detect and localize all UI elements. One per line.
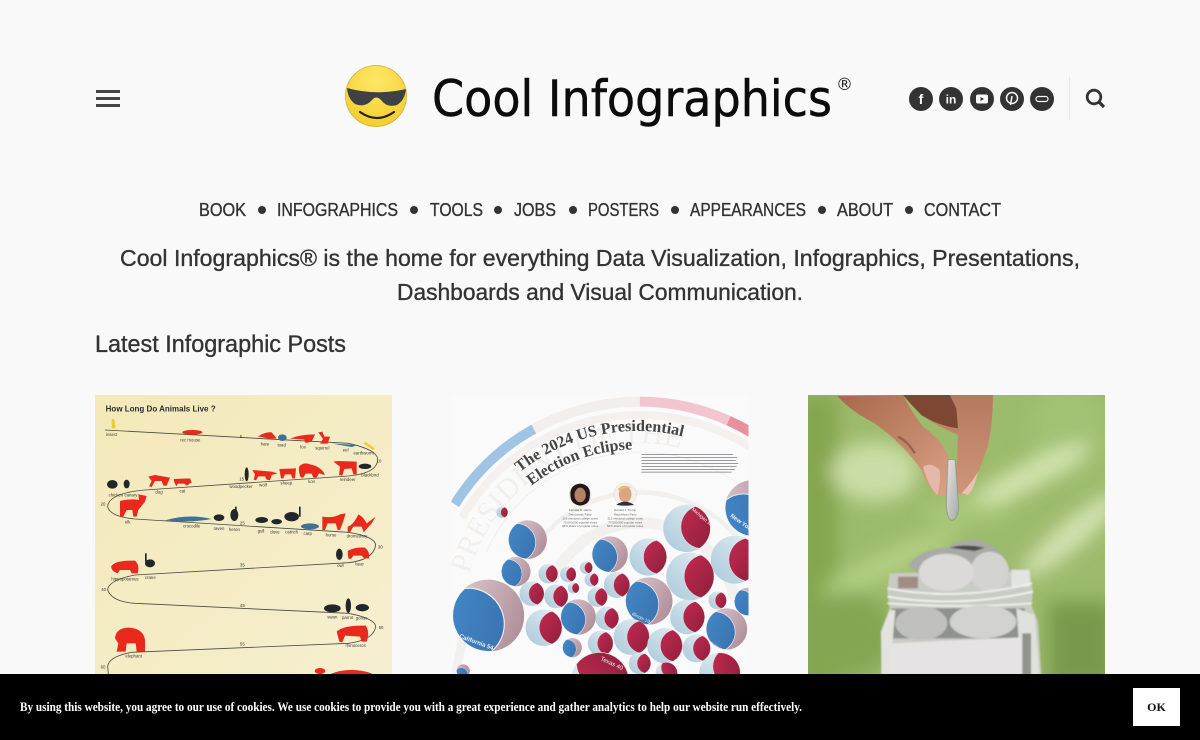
icon: facebook (909, 87, 933, 111)
red animals (111, 430, 376, 675)
animal labels: lion (308, 479, 316, 484)
candidate details (562, 508, 644, 528)
blurred green background (795, 382, 1129, 688)
animal labels: 55 (240, 642, 245, 647)
intro paragraph (642, 454, 738, 473)
state labels: Illinois 19 (631, 611, 651, 624)
animal labels: dromedary (347, 534, 368, 539)
animal labels: squirrel (315, 446, 329, 451)
animal labels: dove (270, 529, 280, 534)
cookie banner (0, 674, 1200, 740)
navigation menu (199, 200, 1001, 220)
state labels: California 54 (458, 634, 495, 652)
title: How Long Do Animals Live ? (106, 405, 216, 414)
animal labels: 25 (240, 520, 245, 525)
logo wordmark: Cool Infographics (432, 70, 832, 128)
state labels: Virginia 13 (708, 640, 730, 655)
candidate details: 312 electoral college votes (607, 517, 643, 521)
candidate details: 75,000,000 popular votes (563, 520, 598, 524)
black and blue animals (107, 464, 371, 613)
red state bubbles (496, 503, 759, 716)
falling coin (946, 459, 959, 520)
animal labels: swan (327, 614, 338, 619)
animal labels: ostrich (285, 530, 299, 535)
logo (346, 66, 853, 128)
animal labels: gull (258, 529, 264, 534)
animal labels: carp (303, 531, 312, 536)
state labels: Texas 40 (599, 656, 624, 672)
tagline: Cool Infographics® is the home for everything Data Visualization, Infographics, Presentations, (120, 245, 1080, 271)
animal labels: bear (355, 562, 365, 567)
thumb and palm (903, 395, 993, 494)
icon: linkedin: in (946, 92, 956, 106)
tagline: Dashboards and Visual Communication. (397, 279, 803, 305)
animal labels: hippopotamus (111, 576, 139, 581)
animal labels: goose (356, 616, 368, 621)
state labels: Michigan 15 (691, 507, 714, 527)
animal labels: chicken canary (109, 493, 138, 498)
navigation menu: POSTERS (588, 200, 659, 220)
candidate details: 226 electoral college votes (562, 517, 598, 521)
navigation menu: BOOK (199, 200, 246, 220)
seal backdrop: PRESIDENT OF THE (452, 424, 681, 573)
icon: youtube (970, 87, 994, 111)
animal labels: cat (179, 488, 186, 493)
animal labels: 35 (240, 562, 245, 567)
hand (837, 395, 993, 497)
tagline (120, 245, 1080, 305)
navigation menu: JOBS (514, 200, 556, 220)
animal labels: horse (326, 532, 337, 537)
animal labels: blackbird (361, 472, 379, 477)
card: coins in jar photo (808, 395, 1105, 674)
candidate portraits (569, 483, 636, 506)
blue state bubbles (441, 469, 793, 680)
animal labels: eel (343, 448, 349, 453)
animal labels: 40 (101, 587, 107, 592)
navigation menu: INFOGRAPHICS (277, 200, 398, 220)
animal labels: woodpecker (229, 484, 253, 489)
candidate details: Kamala D. Harris (569, 508, 592, 512)
index finger (837, 395, 949, 497)
animal labels: 60 (101, 664, 106, 669)
animal labels: insect (106, 432, 118, 437)
animal labels: rhinoceros (346, 643, 366, 648)
animal labels (101, 432, 384, 669)
registered mark: ® (836, 75, 853, 95)
animal labels: 10 (377, 458, 382, 463)
chart title: The 2024 US Presidential (514, 420, 684, 471)
animal labels: owl (337, 563, 344, 568)
animal labels: rec mouse (180, 437, 201, 442)
icon: pinterest (1000, 87, 1024, 111)
animal labels: crocodile (183, 524, 201, 529)
navigation menu: ABOUT (837, 200, 893, 220)
animal labels: toad (277, 443, 286, 448)
state labels: Ohio 17 (694, 550, 711, 558)
animal labels: hare (261, 442, 270, 447)
animal labels: 15 (239, 477, 245, 482)
animal labels: 50 (379, 625, 384, 630)
icon: sunglasses smiley (346, 66, 406, 126)
state labels: New York 28 (729, 513, 761, 539)
navigation menu: CONTACT (924, 200, 1001, 220)
section heading: Latest Infographic Posts (95, 331, 346, 358)
glass jar with coins (881, 540, 1041, 675)
timeline path (105, 430, 378, 674)
animal labels: crane (145, 575, 156, 580)
candidate details: Republican Party (614, 513, 637, 517)
OK button: OK (1147, 700, 1166, 714)
OK button (1133, 688, 1180, 726)
card: How Long Do Animals Live (95, 395, 392, 674)
navigation menu: TOOLS (430, 200, 483, 220)
card: 2024 US Presidential Election Eclipse (452, 396, 761, 674)
seal backdrop (452, 411, 748, 674)
animal labels: 5 (240, 434, 243, 439)
navigation menu: APPEARANCES (690, 200, 806, 220)
animal labels: wolf (259, 483, 268, 488)
animal labels: elephant (125, 654, 143, 659)
cookie notice text: By using this website, you agree to our use of cookies. We use cookies to provide you with a great experience and gather analytics to help our website run effectively. (20, 700, 802, 714)
icon: search (1087, 90, 1104, 107)
animal labels: dog (155, 489, 163, 494)
candidate details: Donald J. Trump (614, 508, 636, 512)
candidate details: 48% share of popular votes (562, 524, 599, 528)
animal labels: 45 (240, 603, 245, 608)
animal labels: raven (214, 526, 225, 531)
candidate details: 50% share of popular votes (607, 524, 644, 528)
animal labels: sheep (280, 480, 293, 485)
icon: link (1030, 87, 1054, 111)
social icons (909, 87, 1054, 111)
animal labels: elk (125, 519, 131, 524)
state labels (458, 507, 761, 672)
animal labels: fox (300, 444, 307, 449)
animal labels: heron (229, 527, 240, 532)
icon: hamburger menu (96, 90, 120, 107)
animal labels: 20 (101, 502, 106, 507)
animal labels: parrot (342, 615, 354, 620)
animal labels: 30 (378, 544, 383, 549)
animal labels: reindeer (340, 477, 356, 482)
electoral arc (455, 402, 756, 504)
candidate details: Democratic Party (569, 513, 592, 517)
icon: facebook: f (919, 91, 924, 107)
icon: linkedin (939, 87, 963, 111)
animal labels: earthworm (353, 450, 374, 455)
candidate details: 77,000,000 popular votes (608, 520, 643, 524)
chart title: Election Eclipse (526, 440, 632, 486)
